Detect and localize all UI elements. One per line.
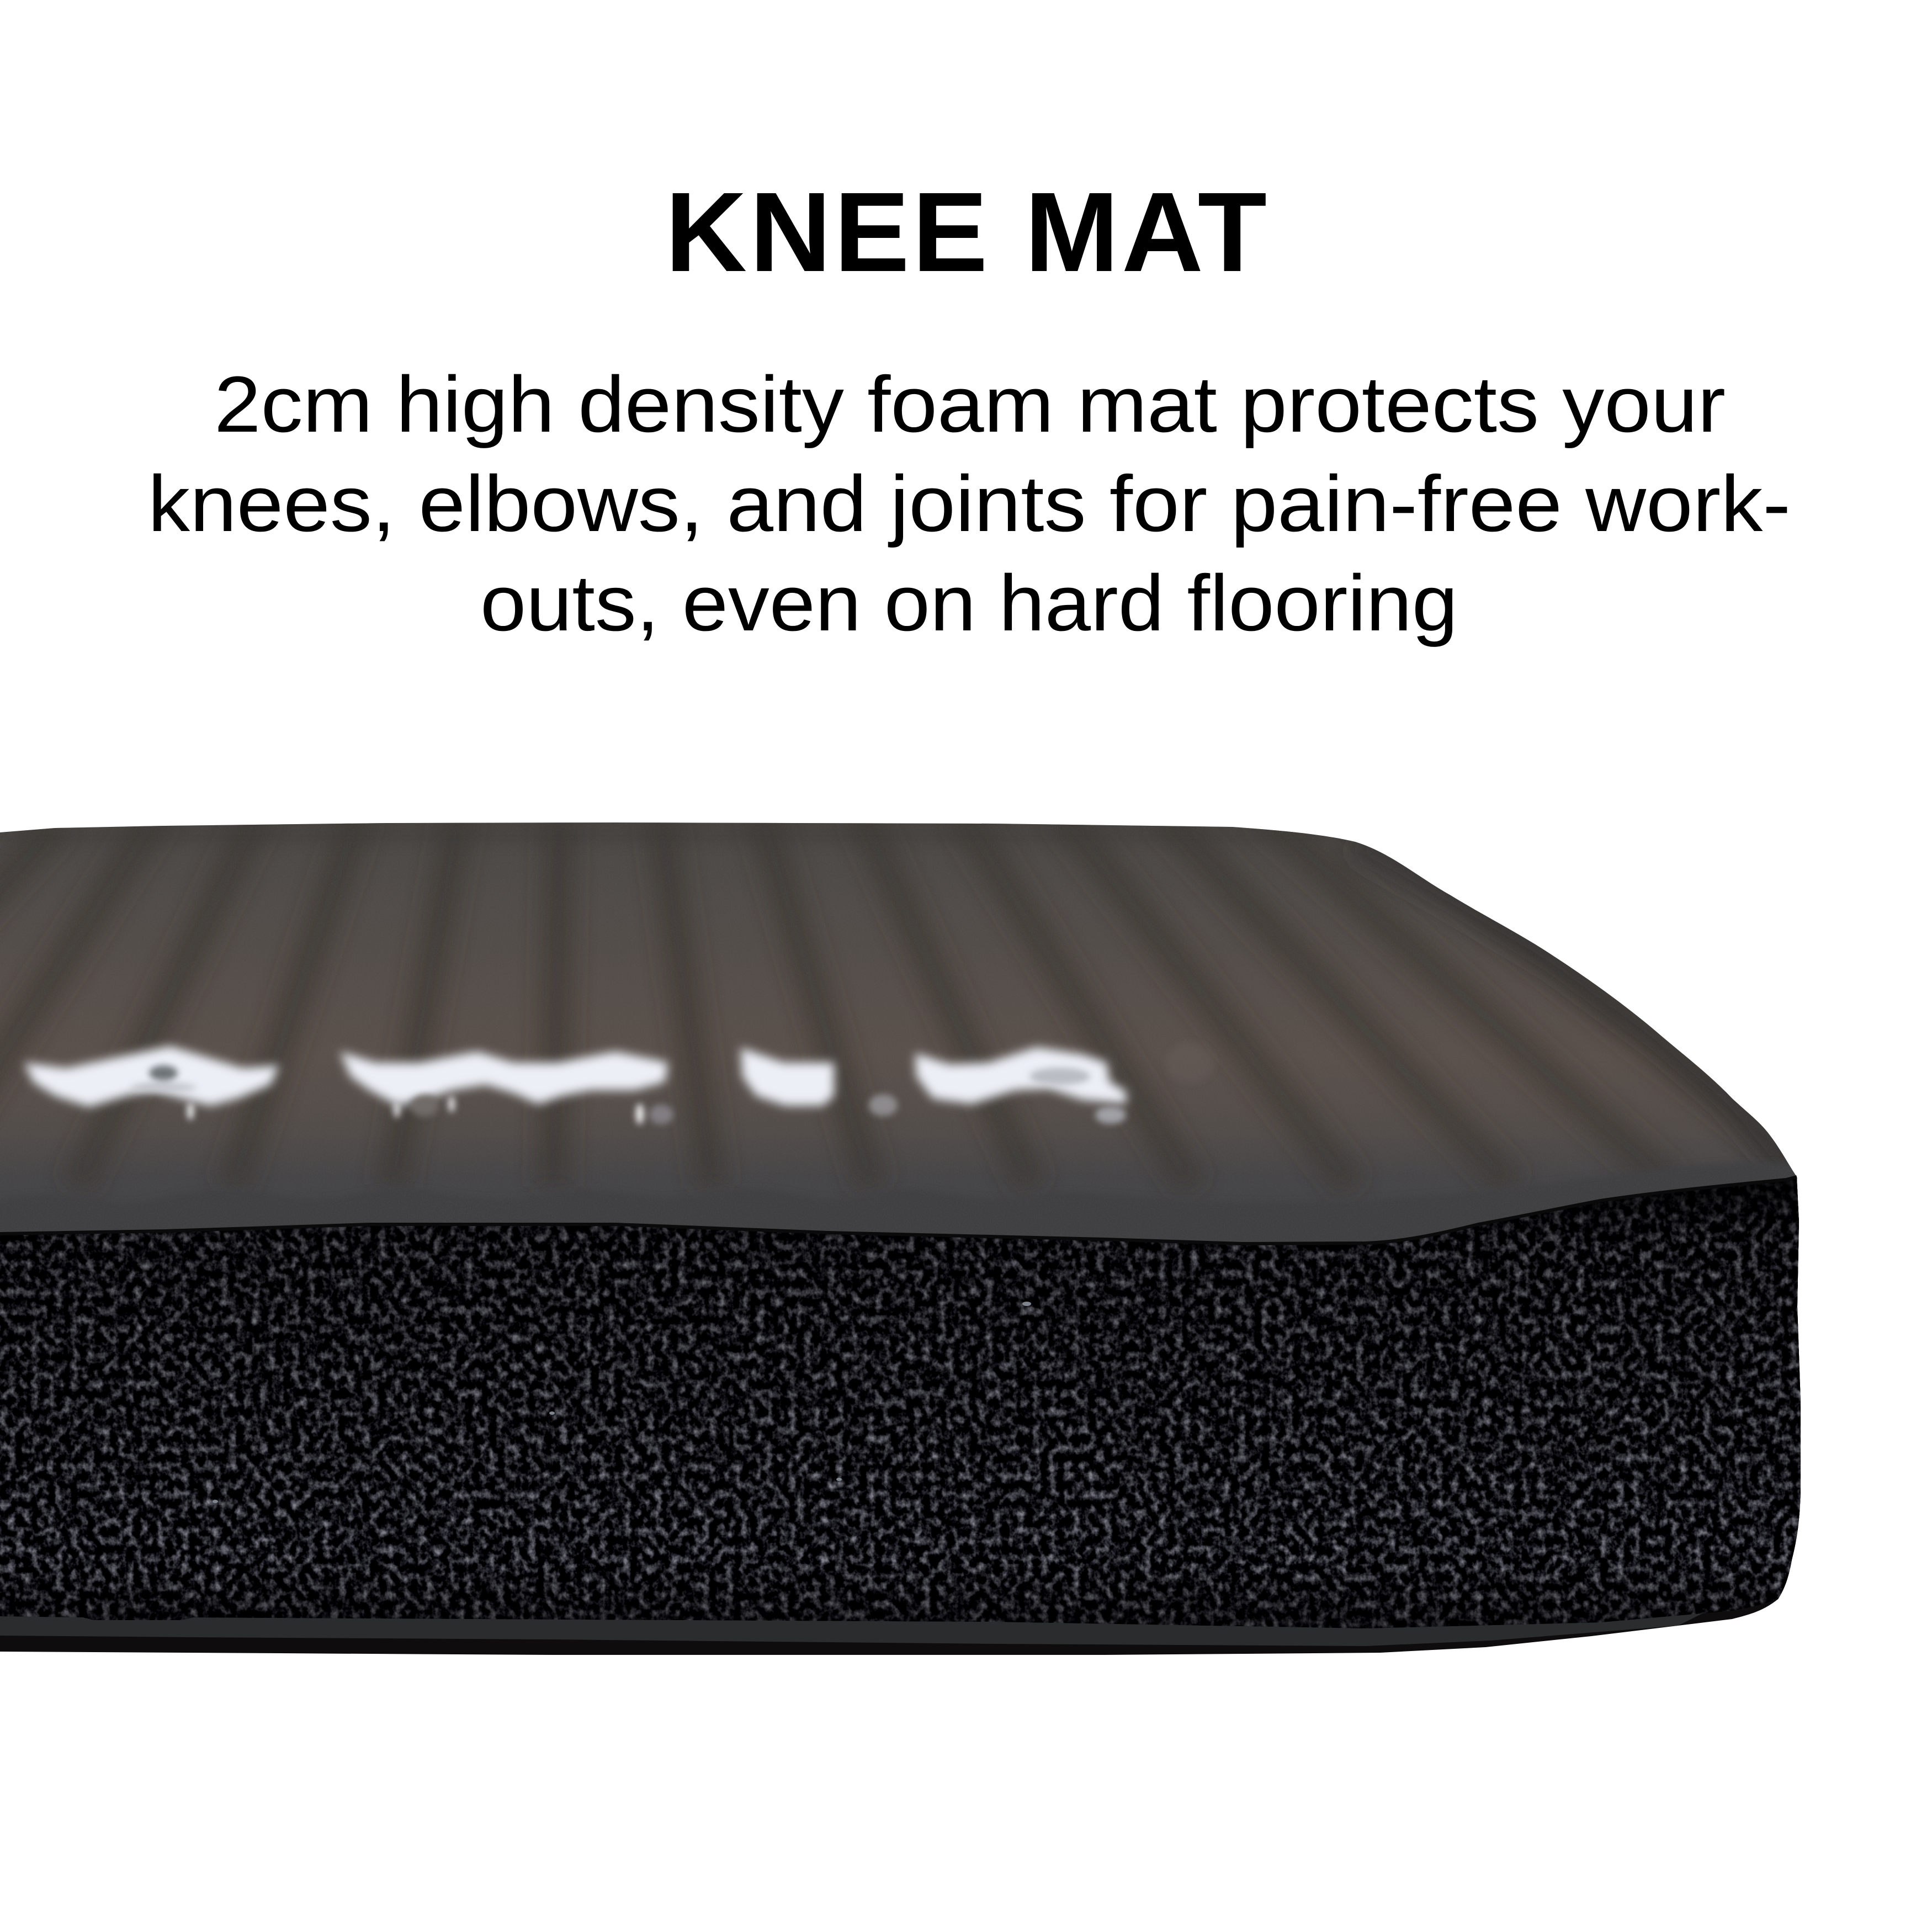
- title: KNEE MAT: [665, 169, 1267, 295]
- lower skin layer: [0, 1609, 1711, 1646]
- back edge darkening: [0, 817, 1822, 845]
- logo glyph I: [741, 1048, 834, 1106]
- foam cross-section: [0, 1170, 1816, 1634]
- front bevel band: [0, 1163, 1800, 1253]
- surface grain: [0, 817, 1822, 1253]
- logo glyph W: [340, 1052, 668, 1105]
- infographic canvas: [0, 193, 1801, 1655]
- description text block: [148, 360, 1791, 647]
- foam specks: [213, 1302, 1031, 1503]
- description text block: knees, elbows, and joints for pain-free work-: [148, 459, 1791, 548]
- description text block: outs, even on hard flooring: [480, 559, 1458, 647]
- foam top edge line: [0, 1177, 1797, 1244]
- logo inner shading: [130, 1042, 1215, 1092]
- right edge darkening: [1355, 842, 1797, 1177]
- logo small text marks: [187, 1094, 1126, 1124]
- logo glyph A: [24, 1046, 279, 1107]
- logo glyph R: [915, 1047, 1126, 1104]
- product photo: knee mat: [0, 811, 1833, 1655]
- top surface with ribbed stripes: [0, 811, 1833, 1253]
- blurred logo on mat: [24, 1042, 1215, 1124]
- description text block: 2cm high density foam mat protects your: [214, 360, 1726, 449]
- mat base silhouette: [0, 1177, 1801, 1655]
- perspective rib stripes: [0, 811, 1833, 1187]
